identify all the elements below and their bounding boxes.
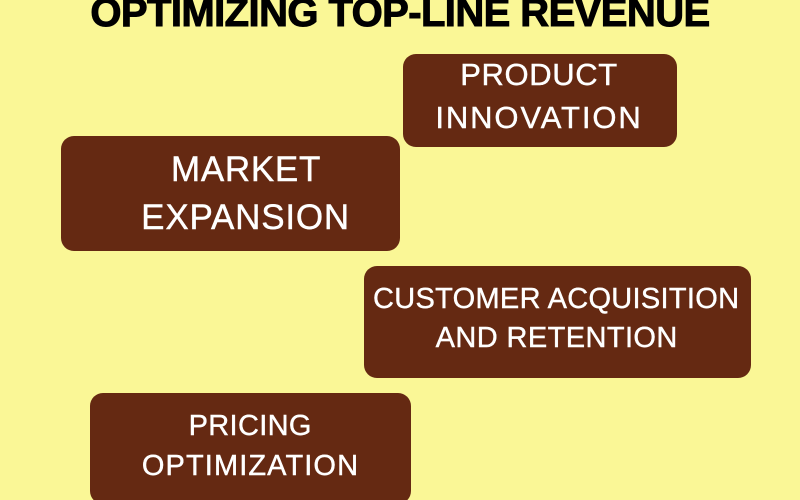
label: optimization: OPTIMIZATION: [142, 450, 359, 482]
panel: pricing optimization: [90, 392, 411, 500]
label: product: PRODUCT: [460, 57, 618, 92]
panel: market expansion: [61, 136, 400, 251]
label: and retention: AND RETENTION: [436, 322, 678, 354]
panel: customer acquisition and retention: [364, 266, 751, 378]
label: customer acquisition: CUSTOMER ACQUISITION: [373, 283, 739, 315]
label: innovation: INNOVATION: [435, 100, 643, 134]
label: pricing: PRICING: [189, 410, 312, 442]
label: expansion: EXPANSION: [141, 198, 350, 236]
panel: product innovation: [403, 54, 677, 147]
label: market: MARKET: [171, 150, 321, 189]
